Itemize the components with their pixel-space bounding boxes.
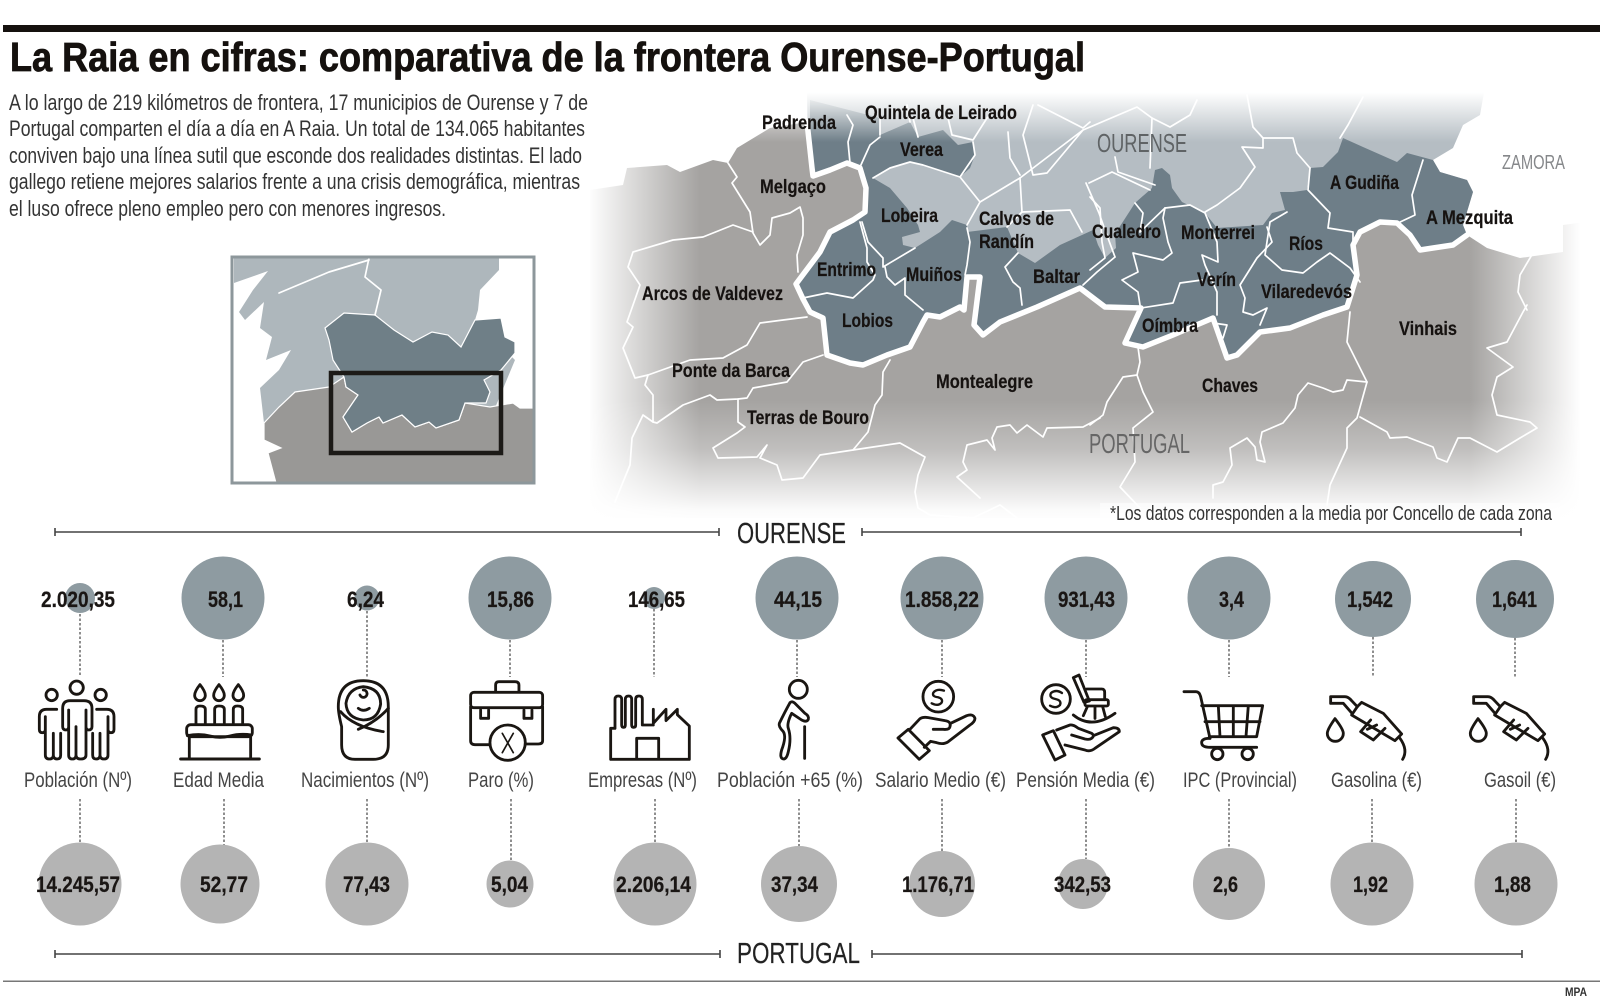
intro text: conviven bajo una línea sutil que esconde dos realidades distintas. El lado xyxy=(9,143,582,168)
map labels: Lobeira xyxy=(881,205,938,227)
value: Salario Portugal xyxy=(902,851,975,917)
value: Edad Media Ourense: 58,1 xyxy=(208,587,243,612)
intro text: gallego retiene mejores salarios frente a una crisis demográfica, mientras xyxy=(9,169,580,194)
map: Raia municipalities in Ourense xyxy=(790,100,1473,380)
value: Gasoil Ourense xyxy=(1476,560,1554,638)
map: edge fades xyxy=(585,80,1600,528)
intro text: Portugal comparten el día a día en A Raia. Un total de 134.065 habitantes xyxy=(9,116,585,141)
top black bar xyxy=(3,25,1600,32)
intro text: el luso ofrece pleno empleo pero con menores ingresos. xyxy=(9,196,446,221)
value: Gasoil Portugal xyxy=(1474,842,1558,926)
value: Nacimientos Portugal xyxy=(326,842,408,926)
value: Empresas Ourense: 146,65 xyxy=(628,587,685,612)
Ourense header rule xyxy=(55,518,1521,550)
map labels: Chaves xyxy=(1202,375,1258,397)
value: Pensión Ourense xyxy=(1044,556,1128,640)
value: Salario Portugal: 1.176,71 xyxy=(902,872,974,897)
map labels: Calvos de xyxy=(979,208,1054,230)
value: Paro Portugal xyxy=(486,860,534,908)
Portugal footer rule: PORTUGAL xyxy=(737,938,860,970)
indicator labels: Nacimientos (Nº) xyxy=(301,768,429,792)
map: municipal boundaries xyxy=(615,95,1537,518)
main map xyxy=(585,80,1600,528)
map labels: A Mezquita xyxy=(1426,207,1513,229)
value: Población Portugal xyxy=(36,842,122,926)
map labels: Verea xyxy=(900,139,943,161)
value: Salario Ourense xyxy=(900,556,984,640)
Ourense header rule: OURENSE xyxy=(737,518,846,550)
map labels: ZAMORA xyxy=(1502,152,1565,174)
map labels: Baltar xyxy=(1033,266,1080,288)
map labels: Quintela de Leirado xyxy=(865,102,1017,124)
value: Paro Portugal: 5,04 xyxy=(491,872,528,897)
map labels: Terras de Bouro xyxy=(747,407,869,429)
value: Población Ourense: 2.020,35 xyxy=(41,587,115,612)
map labels: Melgaço xyxy=(760,176,826,198)
map labels xyxy=(642,102,1565,459)
icon: birthday cake xyxy=(181,685,259,759)
value: Gasolina Portugal: 1,92 xyxy=(1353,872,1388,897)
intro text: A lo largo de 219 kilómetros de frontera, 17 municipios de Ourense y 7 de xyxy=(9,90,588,115)
map labels: Ponte da Barca xyxy=(672,360,790,382)
map labels: Verín xyxy=(1197,269,1236,291)
value: Gasolina Ourense xyxy=(1335,561,1411,637)
indicator labels: Pensión Media (€) xyxy=(1016,768,1155,792)
map: Ourense light area xyxy=(790,88,1485,380)
value: Gasolina Ourense: 1,542 xyxy=(1347,587,1393,612)
credit: MPA xyxy=(1565,985,1587,999)
map labels: Arcos de Valdevez xyxy=(642,283,783,305)
map labels: OURENSE xyxy=(1097,128,1187,158)
value: Pensión Ourense: 931,43 xyxy=(1058,587,1115,612)
icon: elderly person xyxy=(779,680,808,759)
value: Empresas Portugal xyxy=(614,842,696,926)
value: Pensión Portugal xyxy=(1054,859,1111,909)
Ourense values xyxy=(41,556,1554,640)
map labels: PORTUGAL xyxy=(1089,428,1190,459)
value: Nacimientos Portugal: 77,43 xyxy=(343,872,390,897)
value: Población Portugal: 14.245,57 xyxy=(36,872,120,897)
indicator labels: Población +65 (%) xyxy=(717,768,863,792)
map labels: Ríos xyxy=(1289,233,1323,255)
value: Población +65 Portugal xyxy=(761,846,837,922)
value: Población +65 Ourense: 44,15 xyxy=(774,587,822,612)
map labels: Randín xyxy=(979,231,1034,253)
map labels: Padrenda xyxy=(762,112,836,134)
Portugal footer rule xyxy=(55,938,1522,970)
icon: hand with coin xyxy=(898,681,975,759)
value: Edad Media Portugal: 52,77 xyxy=(200,872,248,897)
title: La Raia en cifras: comparativa de la frontera Ourense-Portugal xyxy=(10,34,1085,80)
indicator labels: Paro (%) xyxy=(468,768,534,792)
icon: population xyxy=(39,681,114,759)
Portugal values xyxy=(36,842,1558,926)
map: thick border line xyxy=(796,122,1467,365)
value: IPC Portugal: 2,6 xyxy=(1213,872,1238,897)
icon: briefcase unemployment xyxy=(471,682,543,760)
indicator labels: Gasolina (€) xyxy=(1331,768,1422,792)
value: Población +65 Portugal: 37,34 xyxy=(771,872,818,897)
indicator labels: Salario Medio (€) xyxy=(875,768,1006,792)
map labels: Muiños xyxy=(906,264,962,286)
map labels: Entrimo xyxy=(817,259,876,281)
map labels: A Gudiña xyxy=(1330,172,1399,194)
value: IPC Ourense xyxy=(1188,556,1270,640)
value: IPC Portugal xyxy=(1193,848,1265,920)
map labels: Oímbra xyxy=(1142,315,1198,337)
icon: pension coin and rocking chair xyxy=(1042,675,1119,760)
indicator labels: IPC (Provincial) xyxy=(1183,768,1297,792)
dotted connectors xyxy=(80,609,1516,861)
value: Edad Media Ourense xyxy=(182,556,264,640)
icon: petrol nozzle xyxy=(1327,697,1405,759)
map labels: Montealegre xyxy=(936,371,1033,393)
value: Paro Ourense xyxy=(468,556,552,640)
inset locator map xyxy=(232,257,534,483)
indicator labels: Edad Media xyxy=(173,768,264,792)
value: Gasoil Ourense: 1,641 xyxy=(1492,587,1537,612)
value: Pensión Portugal: 342,53 xyxy=(1054,872,1111,897)
indicator labels: Población (Nº) xyxy=(24,768,132,792)
value: Paro Ourense: 15,86 xyxy=(487,587,534,612)
map labels: Cualedro xyxy=(1092,221,1161,243)
icon: shopping cart xyxy=(1184,692,1263,760)
value: IPC Ourense: 3,4 xyxy=(1219,587,1244,612)
icon: newborn baby xyxy=(338,681,388,759)
icon: factory xyxy=(611,696,689,759)
map labels: Vilaredevós xyxy=(1261,281,1352,303)
map labels: Lobios xyxy=(842,310,893,332)
value: Población +65 Ourense xyxy=(756,556,838,640)
value: Edad Media Portugal xyxy=(180,844,260,924)
value: Nacimientos Ourense: 6,24 xyxy=(347,587,384,612)
indicator labels xyxy=(24,768,1556,792)
map labels: Monterrei xyxy=(1181,222,1255,244)
intro text xyxy=(9,90,588,221)
indicator labels: Gasoil (€) xyxy=(1484,768,1556,792)
value: Salario Ourense: 1.858,22 xyxy=(905,587,979,612)
map labels: Vinhais xyxy=(1399,318,1457,340)
value: Empresas Portugal: 2.206,14 xyxy=(616,872,691,897)
indicator labels: Empresas (Nº) xyxy=(588,768,697,792)
value: Gasolina Portugal xyxy=(1330,842,1414,926)
value: Gasoil Portugal: 1,88 xyxy=(1494,872,1531,897)
icon: diesel nozzle xyxy=(1470,697,1548,759)
map: Portugal area xyxy=(590,122,1600,518)
